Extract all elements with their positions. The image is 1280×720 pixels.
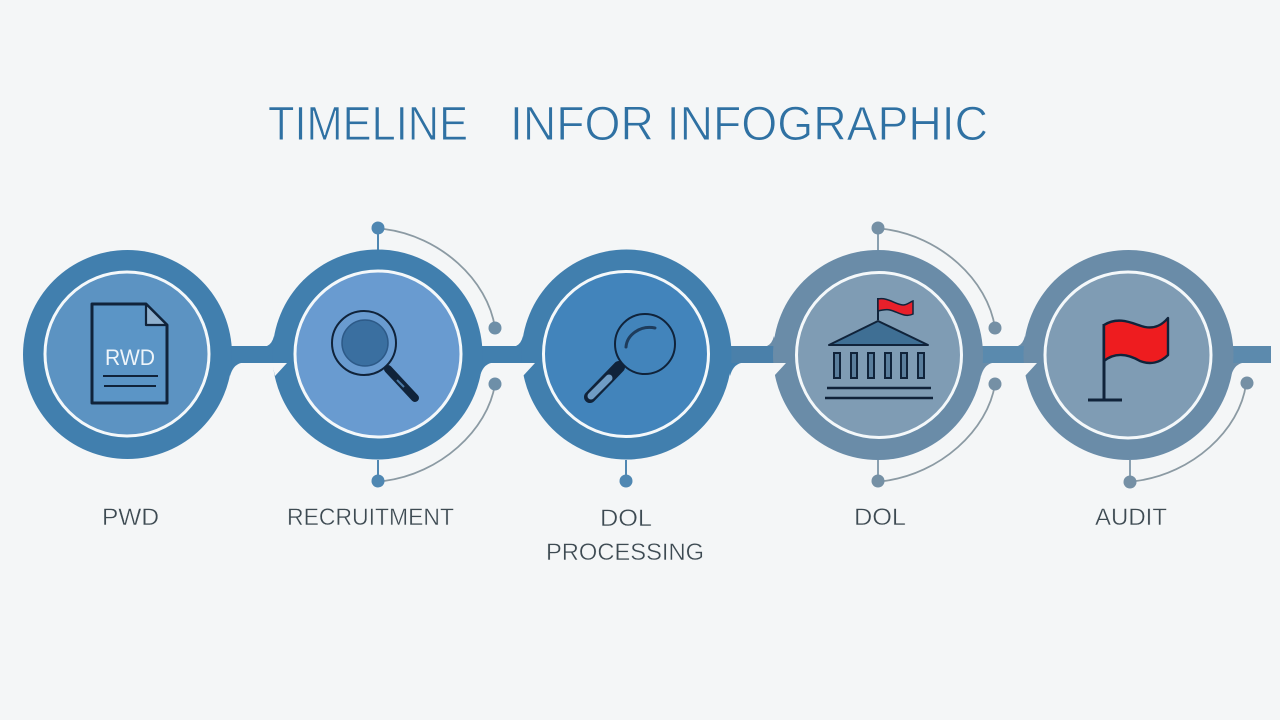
step 2 disc bbox=[295, 271, 461, 437]
icon: magnifier with dark lens bbox=[332, 311, 415, 398]
step 2: Recruitment bbox=[272, 222, 502, 488]
icon: red flag bbox=[1088, 318, 1168, 400]
step 3 disc bbox=[544, 272, 708, 436]
title: TIMELINE bbox=[268, 98, 468, 151]
step 3 notch bbox=[521, 363, 535, 376]
icon: document: RWD bbox=[105, 345, 155, 370]
step 4 ring bbox=[773, 250, 983, 460]
step 2 callouts bbox=[372, 222, 502, 488]
step 3 label: PROCESSING bbox=[546, 539, 704, 566]
step 3 ring bbox=[522, 250, 732, 460]
step 4 disc bbox=[796, 272, 962, 438]
step 3: DOL Processing bbox=[521, 250, 732, 488]
step 5 callouts bbox=[1124, 376, 1254, 488]
step 1 label: PWD bbox=[102, 504, 159, 531]
timeline connectors bbox=[225, 336, 1271, 376]
step 4 label: DOL bbox=[854, 504, 906, 531]
step 2 label: RECRUITMENT bbox=[287, 504, 454, 531]
step 5 disc bbox=[1045, 272, 1211, 438]
icon: magnifier bbox=[590, 314, 675, 397]
step 5: Audit bbox=[1023, 250, 1254, 488]
step 3 label bbox=[546, 505, 704, 566]
step 5 ring bbox=[1024, 250, 1234, 460]
step 1 disc bbox=[45, 272, 209, 436]
icon: document bbox=[92, 304, 167, 403]
step 4 notch bbox=[772, 363, 786, 376]
icon: government building with flag bbox=[825, 298, 933, 398]
step 2 ring bbox=[272, 250, 482, 460]
step 1: PWD bbox=[23, 250, 232, 459]
title bbox=[268, 98, 988, 151]
step 4: DOL bbox=[772, 222, 1002, 488]
step 4 callouts bbox=[872, 222, 1002, 488]
step 1 ring bbox=[23, 250, 232, 459]
step 3 stem and dot bbox=[620, 460, 632, 488]
step 5 notch bbox=[1023, 363, 1037, 376]
title: INFOR INFOGRAPHIC bbox=[510, 98, 988, 151]
step 2 notch bbox=[272, 363, 287, 376]
step 3 label: DOL bbox=[600, 505, 652, 532]
step 5 label: AUDIT bbox=[1095, 504, 1167, 531]
